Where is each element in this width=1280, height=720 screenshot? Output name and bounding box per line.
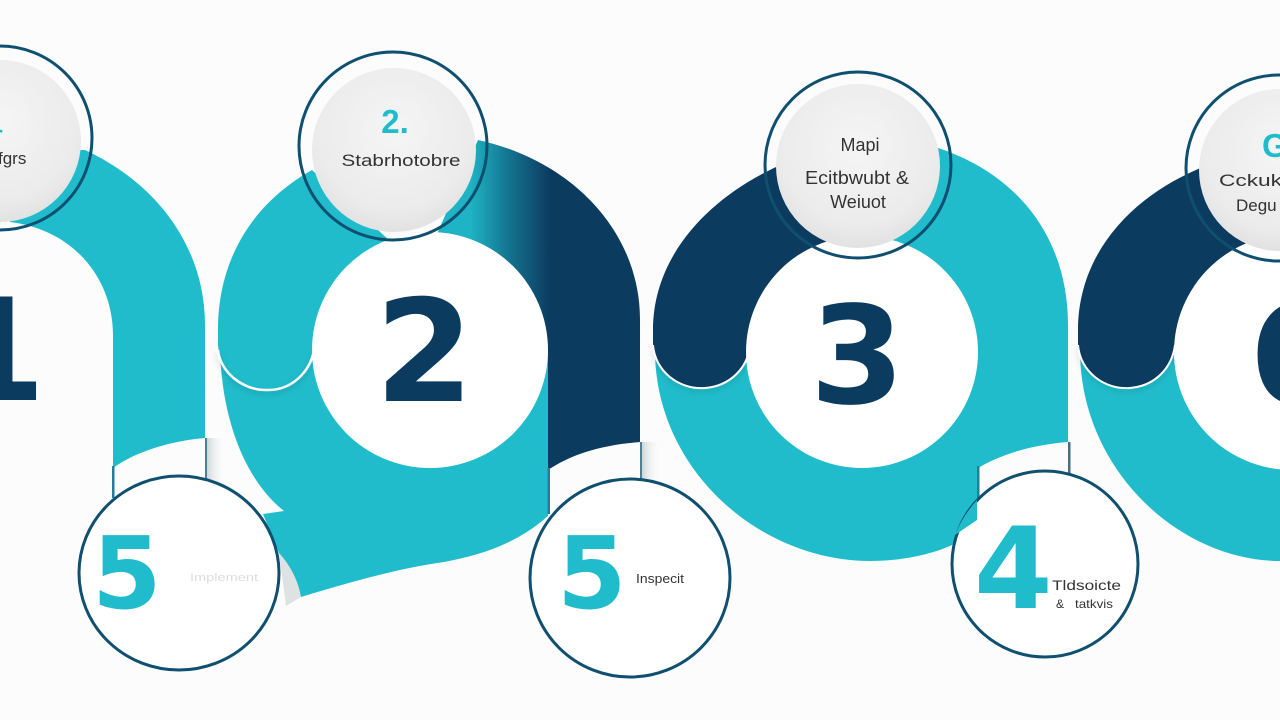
bottom badge 5 left [79,476,279,670]
badge 3 label [805,135,909,212]
step 3 ribbon [653,148,1070,561]
number 5: 5 [557,515,627,632]
label [1052,577,1121,611]
label: tatkvis [1075,597,1113,611]
large number 2: 2 [375,270,474,435]
top badge 4 [1186,75,1280,261]
left teal blob [218,170,400,390]
top badge 2 [299,52,487,240]
label inspect: Inspecit [636,571,684,586]
bottom badge 4 [952,471,1138,657]
badge 4 label: Cckuk [1219,171,1280,190]
badge 3 label: Ecitbwubt & [805,168,909,188]
badge 3 label: Mapi [840,135,880,155]
teal corner inside badge [955,500,977,535]
white centre disc [312,232,548,468]
badge 4 label [1219,171,1280,215]
faint label: Implement [190,572,258,584]
step 4 ribbon [1078,165,1280,561]
step 1 ribbon [0,150,225,498]
bottom badge 5 right [530,479,730,677]
blob rim [218,350,314,390]
right teal arch [860,148,1068,468]
lower teal band [655,350,978,561]
lower teal band [220,350,548,597]
label: & [1056,597,1064,611]
lower teal band [1080,350,1280,561]
white centre disc [746,236,978,468]
left navy blob [653,163,860,388]
badge 2 number: 2. [381,103,409,140]
right navy arch [430,140,640,470]
top badge 3 [765,72,951,258]
step 2 ribbon [218,140,660,606]
badge 4 label: Degu [1236,196,1277,215]
label: Tldsoicte [1052,577,1121,593]
blob rim [653,345,750,388]
badge 3 label: Weiuot [830,192,886,212]
top badge 1 [0,46,92,230]
large number 3: 3 [810,278,905,436]
badge 2 label: Stabrhotobre [342,151,460,170]
folded paper shadow [279,553,301,606]
number 4: 4 [974,503,1053,635]
white centre disc [1174,234,1280,470]
number 5: 5 [92,515,162,632]
blob rim [1078,345,1175,388]
left navy blob [1078,165,1280,388]
